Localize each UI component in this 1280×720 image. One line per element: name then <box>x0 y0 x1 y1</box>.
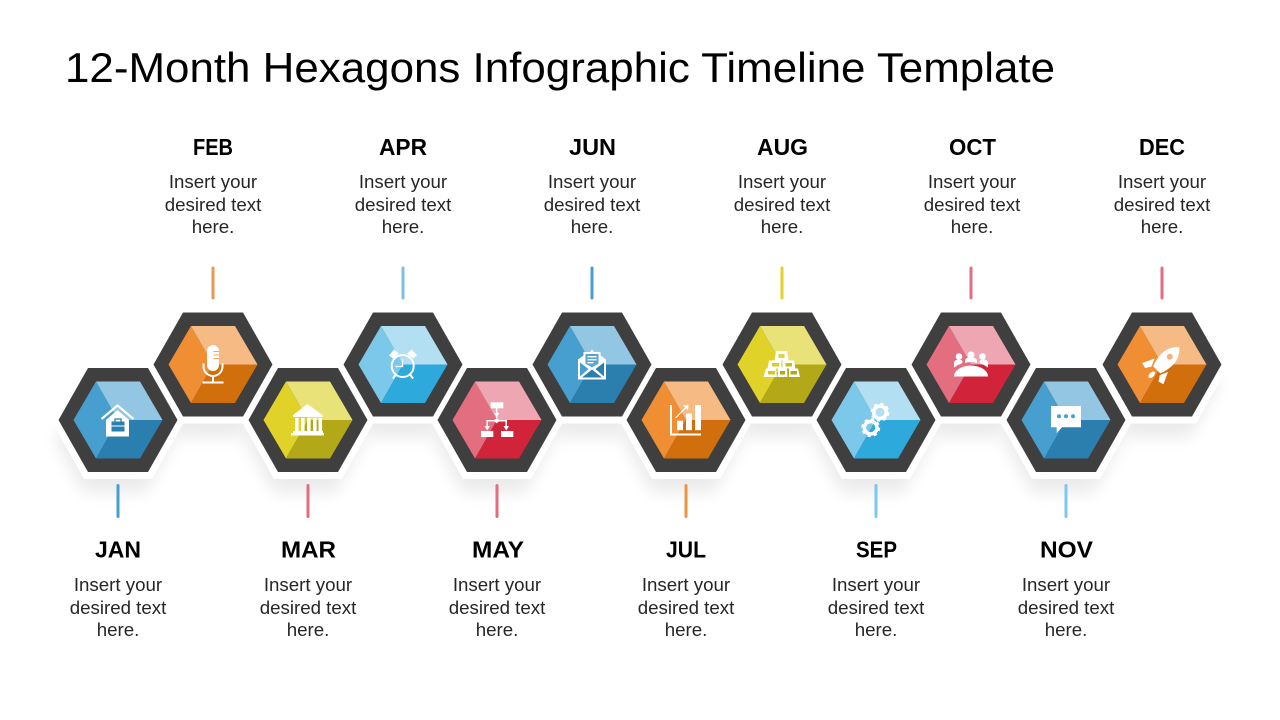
panel: AUG <box>722 134 842 416</box>
hexagon white halos <box>51 306 1229 479</box>
panel: SEP <box>816 368 936 640</box>
APR label: APR <box>379 134 427 160</box>
icon: rocket <box>1138 337 1190 388</box>
APR hexagon <box>344 312 462 416</box>
DEC label: DEC <box>1139 134 1185 160</box>
JUL hexagon <box>626 368 746 472</box>
SEP hexagon <box>816 368 936 472</box>
JAN hexagon <box>58 368 178 472</box>
panel: OCT <box>912 134 1030 416</box>
OCT text: here. <box>951 216 993 237</box>
AUG text: desired text <box>734 194 831 215</box>
AUG text: Insert your <box>738 171 826 192</box>
MAY tick <box>496 484 498 518</box>
MAR text: desired text <box>260 597 357 618</box>
DEC hexagon <box>1102 312 1222 416</box>
DEC tick <box>1160 266 1164 300</box>
JUN hexagon <box>532 312 652 416</box>
panel: JUL <box>626 368 746 640</box>
panel: APR <box>344 134 462 416</box>
icon: meeting table with people <box>954 352 988 376</box>
NOV hexagon <box>1006 368 1126 472</box>
FEB label: FEB <box>193 134 233 160</box>
MAR text: here. <box>287 619 329 640</box>
APR text: Insert your <box>359 171 447 192</box>
MAR text: Insert your <box>264 574 352 595</box>
MAR tick <box>306 484 310 518</box>
MAY text: desired text <box>449 597 546 618</box>
JAN text: desired text <box>70 597 167 618</box>
MAY label: MAY <box>472 536 524 562</box>
OCT tick <box>970 266 972 300</box>
panel: JUN <box>532 134 652 416</box>
MAY text: here. <box>476 619 518 640</box>
panel: JAN <box>58 368 178 640</box>
JUN text: Insert your <box>548 171 636 192</box>
OCT text: desired text <box>924 194 1021 215</box>
NOV text: here. <box>1045 619 1087 640</box>
icon: microphone <box>202 345 224 384</box>
MAY text: Insert your <box>453 574 541 595</box>
panel: MAR <box>248 368 368 640</box>
JUN text: here. <box>571 216 613 237</box>
AUG text: here. <box>761 216 803 237</box>
DEC text: here. <box>1141 216 1183 237</box>
icon: alarm clock <box>389 350 417 378</box>
OCT hexagon <box>912 312 1030 416</box>
JAN text: Insert your <box>74 574 162 595</box>
AUG tick <box>780 266 784 300</box>
panel: NOV <box>1006 368 1126 640</box>
icon: flowchart <box>481 402 513 437</box>
title: 12-Month Hexagons Infographic Timeline Template <box>65 44 1055 91</box>
SEP text: Insert your <box>832 574 920 595</box>
panel: FEB <box>154 134 272 416</box>
icon: open envelope with letter <box>578 350 606 380</box>
FEB text: desired text <box>165 194 262 215</box>
SEP label: SEP <box>856 536 897 562</box>
icon: speech bubble <box>1051 406 1081 433</box>
icon: house with briefcase <box>102 406 134 436</box>
APR text: here. <box>382 216 424 237</box>
icon: bar chart with arrow <box>671 405 701 434</box>
OCT label: OCT <box>949 134 996 160</box>
APR tick <box>402 266 404 300</box>
AUG hexagon <box>722 312 842 416</box>
NOV text: desired text <box>1018 597 1115 618</box>
hexagon shadows <box>55 332 1219 493</box>
SEP tick <box>874 484 878 518</box>
panel: DEC <box>1102 134 1222 416</box>
DEC text: Insert your <box>1118 171 1206 192</box>
JUN label: JUN <box>569 134 616 160</box>
FEB hexagon <box>154 312 272 416</box>
JUL text: desired text <box>638 597 735 618</box>
NOV label: NOV <box>1040 536 1094 562</box>
panel: MAY <box>438 368 556 640</box>
SEP text: desired text <box>828 597 925 618</box>
MAY hexagon <box>438 368 556 472</box>
DEC text: desired text <box>1114 194 1211 215</box>
FEB tick <box>212 266 214 300</box>
NOV text: Insert your <box>1022 574 1110 595</box>
icon: stacked gold bars <box>764 351 800 377</box>
NOV tick <box>1064 484 1068 518</box>
JUL text: here. <box>665 619 707 640</box>
FEB text: here. <box>192 216 234 237</box>
MAR hexagon <box>248 368 368 472</box>
FEB text: Insert your <box>169 171 257 192</box>
JAN text: here. <box>97 619 139 640</box>
JUN tick <box>590 266 594 300</box>
SEP text: here. <box>855 619 897 640</box>
JUL text: Insert your <box>642 574 730 595</box>
AUG label: AUG <box>757 134 808 160</box>
JUL label: JUL <box>666 536 706 562</box>
JAN tick <box>116 484 120 518</box>
icon: gears <box>862 404 888 436</box>
OCT text: Insert your <box>928 171 1016 192</box>
JUN text: desired text <box>544 194 641 215</box>
icon: bank building <box>291 404 324 436</box>
JUL tick <box>684 484 688 518</box>
APR text: desired text <box>355 194 452 215</box>
MAR label: MAR <box>281 536 336 562</box>
JAN label: JAN <box>95 536 141 562</box>
